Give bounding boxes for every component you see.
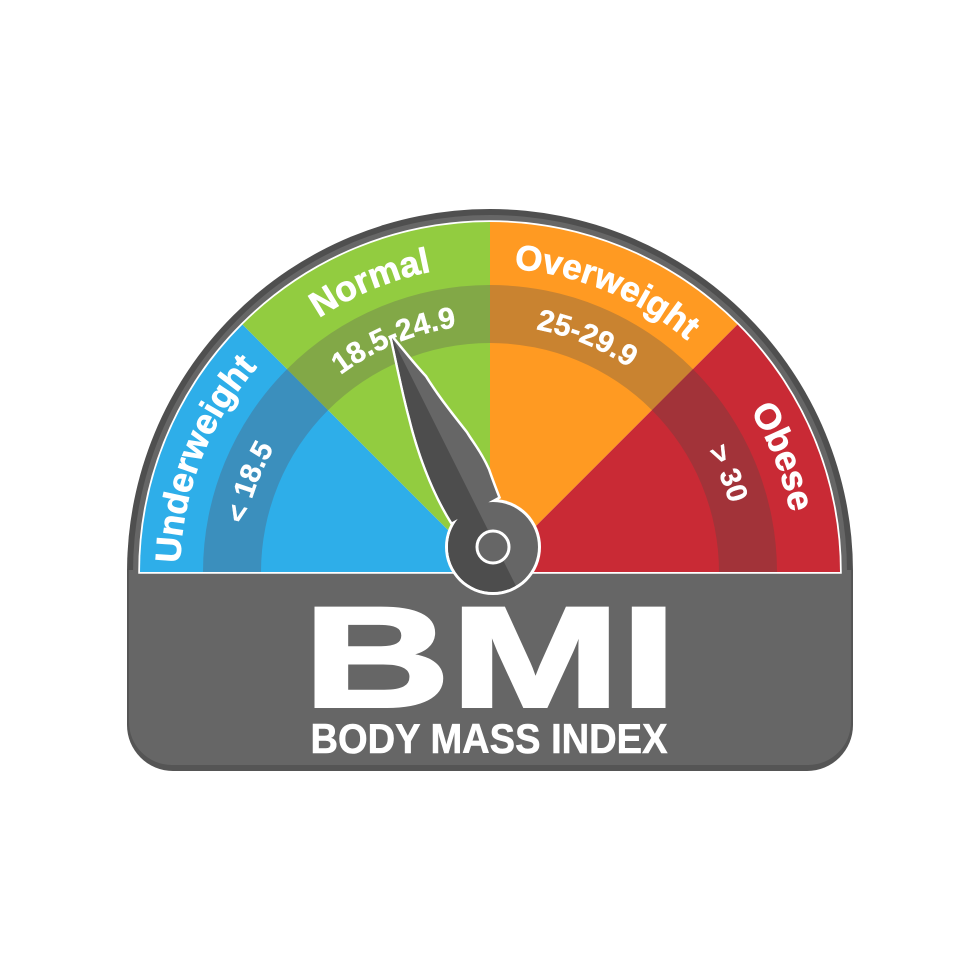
needle light half xyxy=(392,338,538,592)
range: 18.5-24.9: 18.5-24.9 xyxy=(332,308,454,374)
segment: underweight xyxy=(140,324,490,572)
gauge segments xyxy=(139,221,841,573)
subtitle: body mass index: BODY MASS INDEX xyxy=(310,715,668,762)
segment: normal xyxy=(242,222,490,572)
dome rim inner highlight xyxy=(133,215,847,600)
gauge needle xyxy=(390,338,541,595)
label: Obese: Obese xyxy=(754,403,808,510)
band: overweight xyxy=(490,285,693,410)
label: Underweight: Underweight xyxy=(155,354,258,561)
hub white outline xyxy=(445,499,541,595)
hub centre xyxy=(477,531,509,563)
white outline xyxy=(139,221,841,573)
needle white outline xyxy=(392,338,498,522)
gauge body xyxy=(127,209,853,771)
band: normal xyxy=(287,285,490,410)
range: less than 18.5: < 18.5 xyxy=(232,440,272,522)
needle dark half xyxy=(392,338,516,592)
label: Normal: Normal xyxy=(308,246,430,318)
base plate face xyxy=(129,570,851,765)
label: Overweight: Overweight xyxy=(516,246,700,341)
segment: obese xyxy=(490,324,840,572)
band: underweight xyxy=(203,369,328,572)
segment: overweight xyxy=(490,222,738,572)
band: obese xyxy=(652,369,777,572)
dome rim xyxy=(127,209,853,600)
range: greater than 30: > 30 xyxy=(710,444,748,501)
range: 25-29.9: 25-29.9 xyxy=(536,310,637,365)
title: BMI: BMI xyxy=(303,578,677,738)
base plate xyxy=(127,570,853,771)
